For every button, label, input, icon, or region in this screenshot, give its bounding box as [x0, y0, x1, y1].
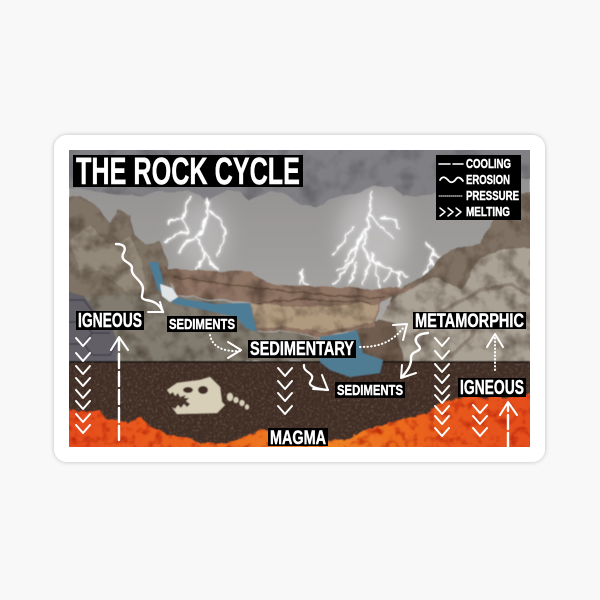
label: magma: MAGMA — [270, 428, 326, 449]
cooling arrow: lava right — [500, 402, 517, 447]
legend: pressure: PRESSURE — [466, 188, 519, 203]
title — [73, 151, 303, 193]
label: sedimentary: SEDIMENTARY — [250, 339, 354, 360]
label: igneous right: IGNEOUS — [460, 377, 524, 399]
lake — [320, 330, 383, 377]
brown plateau — [160, 262, 413, 337]
melting chevrons: lava column — [473, 405, 487, 436]
erosion arrow: mountain to sediments — [116, 244, 163, 312]
t-rex skull fossil — [167, 377, 249, 414]
pressure arrow: right — [487, 334, 503, 370]
title: THE ROCK CYCLE — [76, 151, 300, 193]
scene illustration — [69, 150, 530, 447]
sticker card — [54, 135, 545, 462]
label: igneous left: IGNEOUS — [78, 310, 142, 332]
storm clouds — [69, 150, 530, 208]
legend: cooling: COOLING — [466, 156, 511, 171]
dotted arrow: sediments to sedimentary — [210, 335, 241, 358]
melting chevrons: centre column — [278, 368, 292, 414]
label: metamorphic: METAMORPHIC — [415, 311, 524, 332]
melting chevrons: left column — [76, 338, 90, 433]
melting chevrons: right column — [435, 338, 449, 436]
ground line — [69, 361, 530, 363]
label: sediments left: SEDIMENTS — [169, 316, 235, 333]
legend: melting: MELTING — [466, 204, 510, 219]
brown bank right of lake — [350, 320, 405, 362]
dotted arrow: sedimentary to metamorphic — [360, 324, 407, 347]
tan strata band — [250, 303, 378, 332]
lava — [69, 392, 530, 447]
label: sediments right: SEDIMENTS — [337, 382, 403, 399]
erosion arrow: sedimentary to sediments — [304, 365, 328, 390]
lightning glow — [177, 189, 406, 281]
legend — [436, 155, 521, 220]
underground soil — [69, 362, 530, 445]
left mountain — [60, 195, 172, 365]
waterfall splash — [160, 284, 178, 302]
cooling arrow: left — [111, 337, 128, 440]
land masses — [60, 186, 540, 365]
hexagon basalt columns — [69, 292, 118, 362]
right mountain dark layer — [390, 192, 530, 303]
lightning bolts — [165, 190, 442, 287]
right mountain beige fold — [380, 246, 530, 362]
legend: erosion: EROSION — [466, 172, 510, 187]
waterfall and river — [149, 262, 257, 332]
erosion arrow: metamorphic to sediments — [401, 333, 428, 378]
lower grey rock band — [86, 293, 321, 362]
sky — [69, 178, 530, 362]
